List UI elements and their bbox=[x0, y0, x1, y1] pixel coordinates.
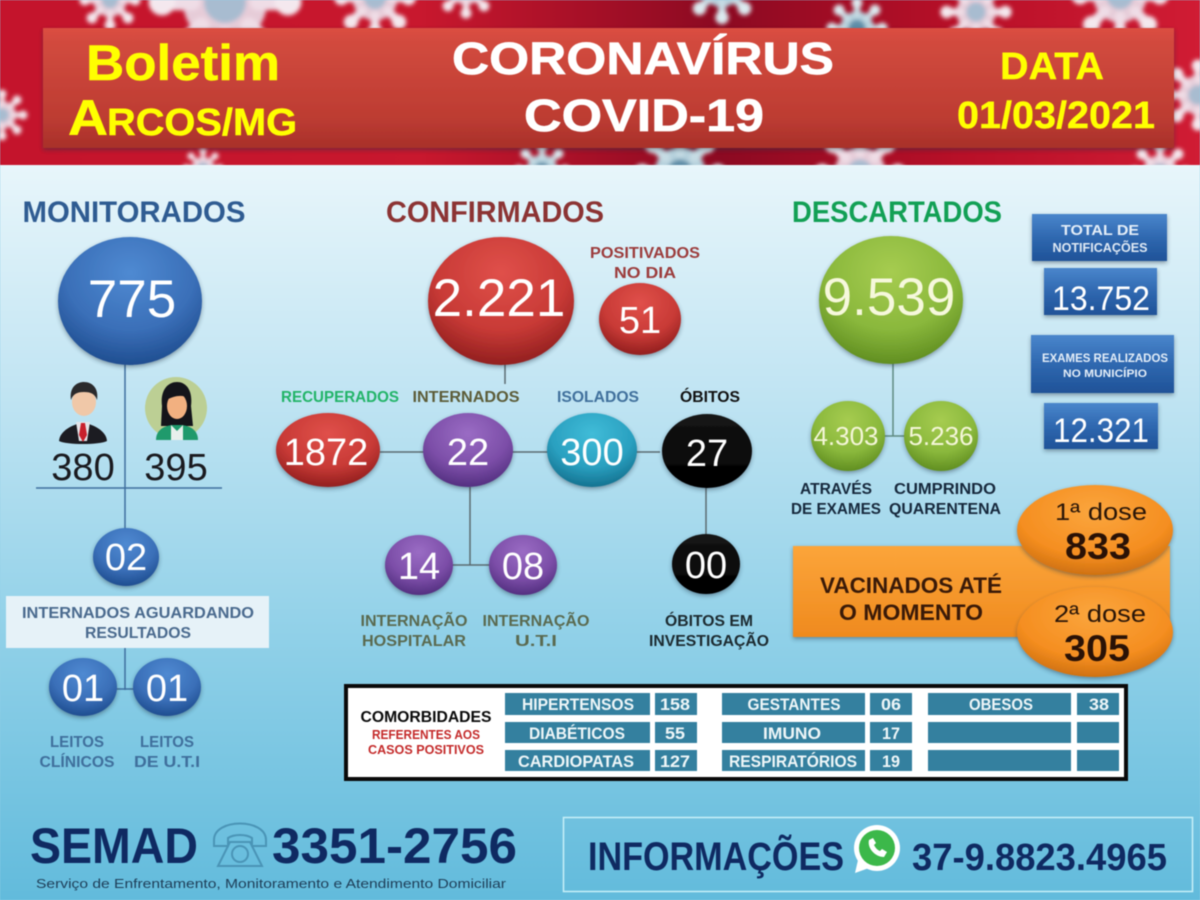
heading: monitorados: MONITORADOS bbox=[22, 196, 246, 229]
panel: descartados bbox=[791, 196, 1002, 518]
label: através de exames: ATRAVÉS bbox=[800, 481, 872, 498]
label: positivados no dia: POSITIVADOS bbox=[590, 245, 700, 262]
bubble: 775 bbox=[58, 237, 202, 365]
heading: descartados: DESCARTADOS bbox=[792, 196, 1002, 229]
date: 01/03/2021 bbox=[957, 95, 1155, 137]
label: através de exames bbox=[791, 481, 881, 518]
text: SEMAD: SEMAD bbox=[30, 818, 198, 874]
label: internados aguardando resultados bbox=[6, 596, 269, 648]
ellipse: 2ª dose: 2ª dose bbox=[1054, 601, 1146, 628]
table text: HIPERTENSOS bbox=[522, 696, 634, 714]
bubble: 4.303 bbox=[811, 401, 885, 471]
table text: CARDIOPATAS bbox=[518, 753, 634, 771]
label: leitos clínicos: LEITOS bbox=[50, 734, 104, 751]
bubble: 22 bbox=[423, 413, 513, 487]
label: cumprindo quarentena bbox=[889, 481, 1001, 518]
ellipse: 1ª dose: 833 bbox=[1065, 526, 1131, 567]
label: internados aguardando resultados: RESULTADOS bbox=[85, 625, 191, 642]
table text: 19 bbox=[882, 753, 900, 771]
bubble: 01 leitos UTI bbox=[133, 658, 201, 716]
label: isolados: ISOLADOS bbox=[557, 389, 639, 406]
panel: comorbidades bbox=[346, 686, 1126, 779]
text: 3351-2756: 3351-2756 bbox=[272, 818, 517, 874]
bubble: 1872: 1872 bbox=[284, 432, 368, 474]
bubble: 02 bbox=[93, 528, 159, 586]
panel: confirmados bbox=[276, 196, 769, 650]
bubble: 02: 02 bbox=[105, 537, 147, 579]
table text: IMUNO bbox=[763, 725, 821, 743]
heading: comorbidades: CASOS POSITIVOS bbox=[368, 742, 484, 757]
title left: Boletim Arcos/MG bbox=[68, 35, 297, 146]
panel: monitorados bbox=[6, 196, 269, 771]
heading: comorbidades: REFERENTES AOS bbox=[372, 727, 480, 742]
bubble: 9.539: 9.539 bbox=[823, 268, 955, 327]
bubble: 1872 bbox=[276, 413, 380, 487]
bubble: 51: 51 bbox=[619, 300, 661, 342]
bubble: 2.221 bbox=[428, 237, 574, 365]
box: label: EXAMES REALIZADOS bbox=[1042, 353, 1168, 365]
box: vacinados até o momento bbox=[793, 546, 1170, 637]
bubble: 4.303: 4.303 bbox=[813, 421, 879, 451]
ellipse: 2ª dose: 305 bbox=[1064, 628, 1130, 669]
panel: vacinados bbox=[793, 485, 1173, 677]
label: internados aguardando resultados: INTERNADOS AGUARDANDO bbox=[22, 605, 254, 622]
icon: man bbox=[59, 382, 107, 444]
label: cumprindo quarentena: QUARENTENA bbox=[889, 501, 1001, 518]
bubble: 14 bbox=[385, 535, 453, 595]
icon: whatsapp bbox=[854, 825, 900, 873]
bubble: 01 leitos UTI: 01 bbox=[146, 668, 188, 710]
panel: exames realizados bbox=[1031, 335, 1174, 450]
ellipse: 2ª dose bbox=[1017, 587, 1173, 677]
bubble: 08 bbox=[489, 535, 557, 595]
footer: informações bbox=[564, 818, 1192, 892]
ellipse: 1ª dose bbox=[1017, 485, 1173, 575]
count: 380: 380 bbox=[51, 447, 115, 489]
label: através de exames: DE EXAMES bbox=[791, 501, 881, 518]
label: leitos clínicos: CLÍNICOS bbox=[40, 754, 114, 771]
date: DATA bbox=[1000, 46, 1104, 88]
text: serviço: Serviço de Enfrentamento, Monitoramento e Atendimento Domiciliar bbox=[36, 876, 507, 891]
box: vacinados até o momento: VACINADOS ATÉ bbox=[820, 573, 1002, 598]
label: internados: INTERNADOS bbox=[412, 389, 520, 406]
box: label bbox=[1031, 335, 1174, 393]
table text: DIABÉTICOS bbox=[529, 724, 625, 743]
table text: 127 bbox=[660, 753, 690, 771]
bubble: 01 leitos clínicos: 01 bbox=[62, 668, 104, 710]
bubble: 2.221: 2.221 bbox=[433, 269, 565, 328]
bubble: 300 bbox=[547, 413, 637, 487]
table text: 158 bbox=[660, 696, 690, 714]
text: whatsapp number: 37-9.8823.4965 bbox=[912, 837, 1167, 879]
count: 395: 395 bbox=[144, 447, 208, 489]
bubble: 08: 08 bbox=[502, 546, 544, 588]
box: label bbox=[1032, 214, 1167, 261]
text: informações: INFORMAÇÕES bbox=[588, 833, 844, 879]
table text: 06 bbox=[881, 696, 901, 714]
connectors bbox=[36, 360, 222, 690]
bubble: 27: 27 bbox=[686, 433, 728, 475]
bubble: 5.236 bbox=[904, 401, 978, 471]
label: leitos clínicos bbox=[40, 734, 114, 771]
label: cumprindo quarentena: CUMPRINDO bbox=[894, 481, 996, 498]
bubble: 27 bbox=[662, 414, 752, 488]
table cells bbox=[505, 693, 1119, 771]
header virus image bbox=[0, 0, 1200, 166]
label: leitos de UTI: DE U.T.I bbox=[134, 754, 200, 771]
footer: semad bbox=[30, 818, 517, 891]
table text: OBESOS bbox=[969, 696, 1033, 714]
label: internação UTI: INTERNAÇÃO bbox=[482, 612, 590, 630]
bubble: 00 bbox=[672, 534, 740, 594]
header banner bbox=[43, 28, 1174, 148]
box: 13.752: 13.752 bbox=[1052, 280, 1150, 318]
table text: GESTANTES bbox=[748, 696, 840, 714]
bubble: 22: 22 bbox=[447, 432, 489, 474]
bubble: 14: 14 bbox=[398, 546, 440, 588]
table text: RESPIRATÓRIOS bbox=[729, 752, 857, 771]
heading: comorbidades: COMORBIDADES bbox=[360, 709, 492, 726]
bubble: 9.539 bbox=[819, 236, 963, 364]
title left: Boletim Arcos/MG: A bbox=[68, 90, 108, 146]
title left: Boletim Arcos/MG: Boletim bbox=[86, 35, 280, 91]
connectors bbox=[380, 360, 706, 565]
bubble: 775: 775 bbox=[88, 270, 176, 329]
title centre: CORONAVÍRUS COVID-19 bbox=[452, 33, 834, 141]
bubble: 01 leitos clínicos bbox=[49, 658, 117, 716]
table text: 17 bbox=[882, 725, 900, 743]
bubble: 300: 300 bbox=[560, 432, 624, 474]
box: 12.321: 12.321 bbox=[1053, 412, 1149, 450]
label: leitos de UTI: LEITOS bbox=[140, 734, 194, 751]
title centre: CORONAVÍRUS COVID-19: COVID-19 bbox=[524, 90, 764, 141]
title centre: CORONAVÍRUS COVID-19: CORONAVÍRUS bbox=[452, 33, 834, 84]
table text bbox=[518, 696, 1109, 771]
label: óbitos em investigação: ÓBITOS EM bbox=[665, 612, 753, 630]
label: óbitos em investigação: INVESTIGAÇÃO bbox=[649, 632, 769, 650]
label: óbitos: ÓBITOS bbox=[680, 387, 740, 406]
bubble: 00: 00 bbox=[685, 545, 727, 587]
box: label: NO MUNICÍPIO bbox=[1063, 367, 1147, 380]
icon: telephone bbox=[214, 824, 266, 866]
bubble: 5.236: 5.236 bbox=[908, 421, 974, 451]
box: vacinados até o momento: O MOMENTO bbox=[839, 600, 983, 625]
label: internação hospitalar: INTERNAÇÃO bbox=[360, 612, 468, 630]
label: internação hospitalar: HOSPITALAR bbox=[362, 633, 466, 650]
label: leitos de UTI bbox=[134, 734, 200, 771]
heading: comorbidades bbox=[360, 709, 492, 757]
icon: woman bbox=[145, 377, 207, 440]
table text: 55 bbox=[665, 725, 685, 743]
ellipse: 1ª dose: 1ª dose bbox=[1055, 499, 1147, 526]
label: recuperados: RECUPERADOS bbox=[281, 389, 399, 406]
box: label: NOTIFICAÇÕES bbox=[1052, 240, 1148, 255]
label: internação UTI bbox=[482, 612, 590, 650]
label: positivados no dia bbox=[590, 245, 700, 282]
title left: Boletim Arcos/MG: RCOS/MG bbox=[107, 102, 297, 144]
box: label: TOTAL DE bbox=[1061, 223, 1139, 239]
panel: total de notificações bbox=[1032, 214, 1167, 318]
heading: confirmados: CONFIRMADOS bbox=[386, 196, 604, 229]
label: internação hospitalar bbox=[360, 612, 468, 650]
table text: 38 bbox=[1089, 696, 1109, 714]
label: positivados no dia: NO DIA bbox=[614, 265, 676, 282]
label: óbitos em investigação bbox=[649, 612, 769, 650]
date bbox=[957, 46, 1155, 137]
label: internação UTI: U.T.I bbox=[515, 633, 557, 650]
bubble: 51 bbox=[599, 283, 681, 355]
connectors bbox=[880, 362, 910, 436]
